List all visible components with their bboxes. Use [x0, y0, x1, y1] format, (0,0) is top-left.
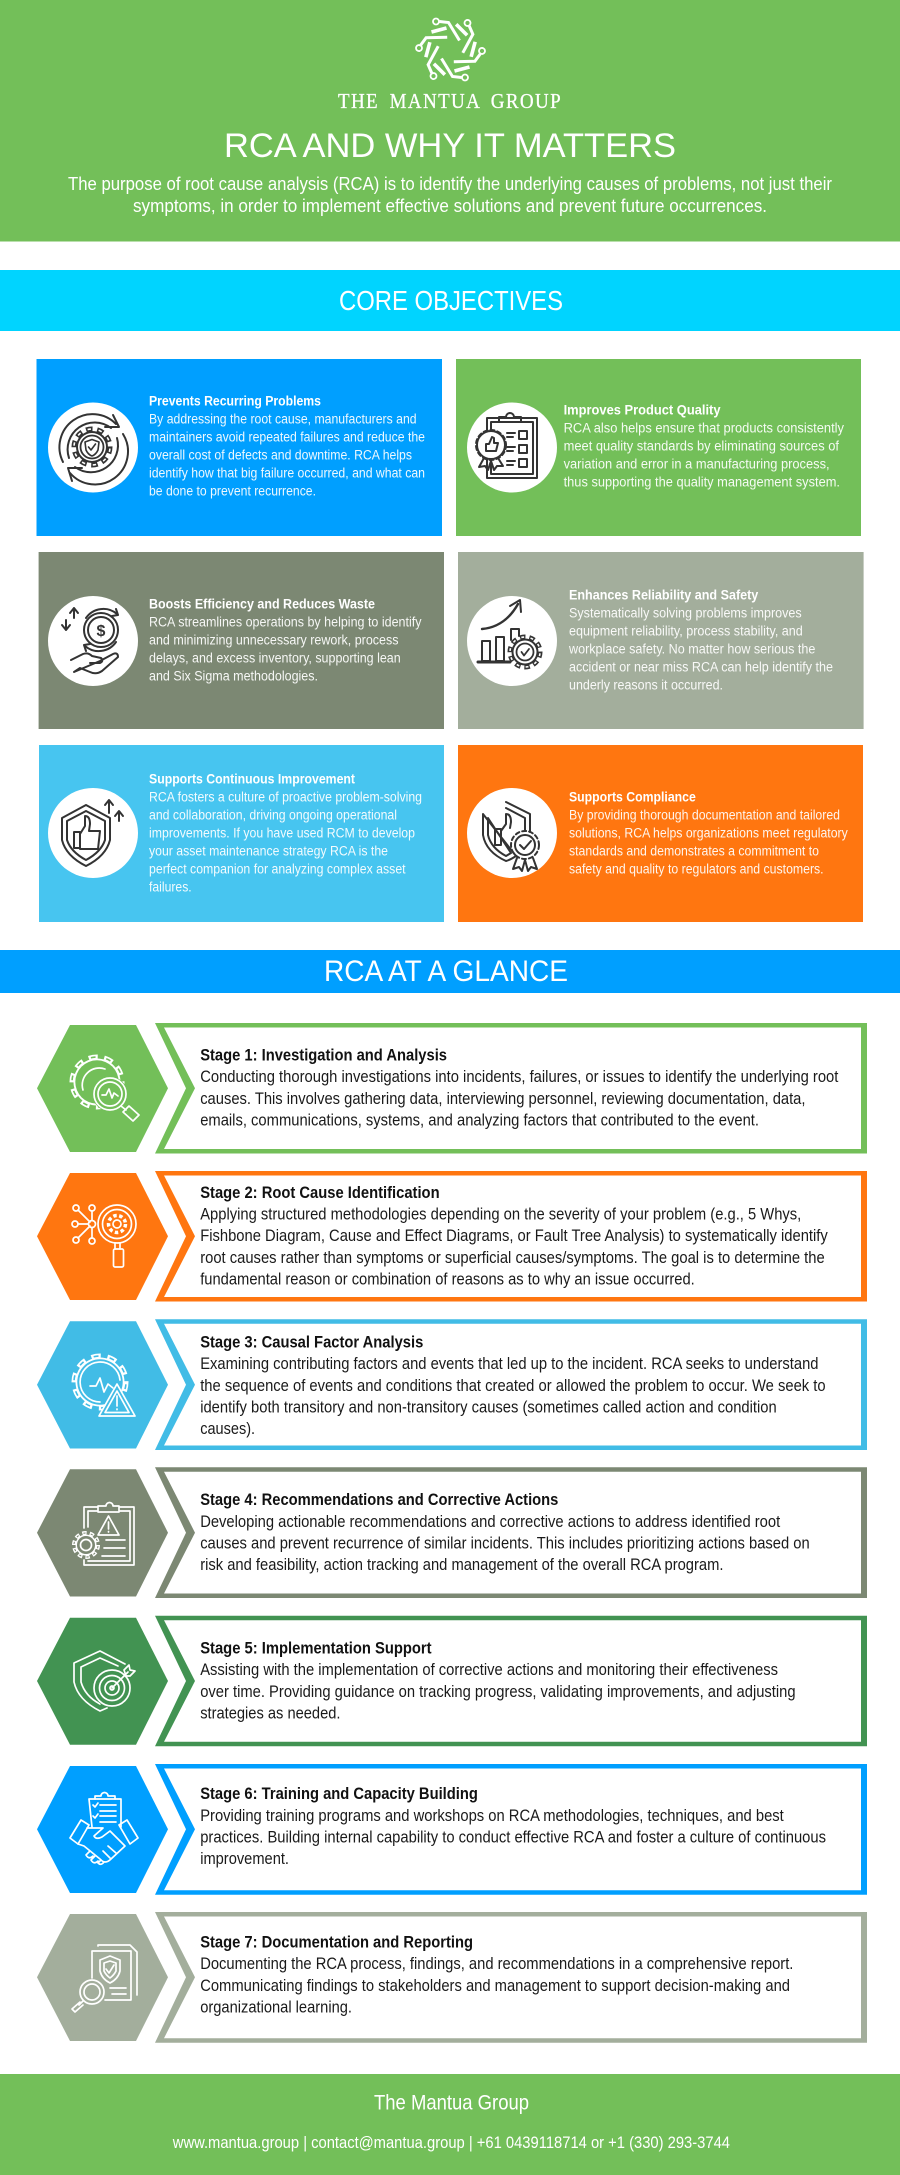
- footer name: The Mantua Group: [374, 2092, 529, 2114]
- body text: causes and prevent recurrence of similar incidents. This includes prioritizing actions based on: [200, 1534, 810, 1552]
- heading: Enhances Reliability and Safety: [569, 588, 759, 602]
- icon: hand with dollar coin: [62, 608, 118, 673]
- icon: hand with dollar coin: $: [96, 623, 106, 640]
- body text: [200, 1955, 793, 2016]
- contact details: www.mantua.group | contact@mantua.group | +61 0439118714 or +1 (330) 293-3744: [172, 2134, 730, 2152]
- title: RCA AND WHY IT MATTERS: [224, 127, 676, 165]
- body text: improvement.: [200, 1850, 289, 1868]
- hexagon: [37, 1469, 168, 1596]
- body text: and minimizing unnecessary rework, process: [149, 632, 399, 648]
- icon: gear with warning triangle: [74, 1356, 136, 1417]
- body text: practices. Building internal capability to conduct effective RCA and foster a culture of continuous: [200, 1828, 826, 1846]
- body text: over time. Providing guidance on tracking progress, validating improvements, and adjusting: [200, 1683, 796, 1701]
- body text: accident or near miss RCA can help identify the: [569, 660, 833, 674]
- panel: footer: [0, 2074, 900, 2175]
- hexagon: [37, 1618, 168, 1745]
- panel: improves product quality: [456, 359, 861, 536]
- icon: clipboard with badge: [476, 413, 537, 478]
- body text: By addressing the root cause, manufacturers and: [149, 412, 417, 426]
- body text: Providing training programs and workshops on RCA methodologies, techniques, and best: [200, 1807, 784, 1825]
- brand name: THE MANTUA GROUP: [338, 89, 562, 113]
- body text: workplace safety. No matter how serious the: [568, 642, 815, 656]
- heading: Stage 6: Training and Capacity Building: [200, 1785, 478, 1803]
- panel: stage 4: [37, 1467, 867, 1598]
- banner: RCA at a glance: [0, 950, 900, 993]
- hexagon: [37, 1173, 168, 1300]
- panel: continuous improvement: [39, 745, 444, 922]
- body text: overall cost of defects and downtime. RCA helps: [149, 448, 412, 462]
- hexagon: [37, 1321, 168, 1448]
- icon: gear with magnifier: [72, 1057, 139, 1121]
- panel: supports compliance: [458, 745, 863, 922]
- body text: [564, 420, 844, 490]
- body text: [149, 790, 422, 894]
- icon: bar chart with gear: [478, 600, 540, 667]
- body text: perfect companion for analyzing complex asset: [149, 862, 406, 876]
- heading: Stage 5: Implementation Support: [200, 1640, 432, 1658]
- icon: network with magnifier: [72, 1205, 136, 1267]
- body text: and Six Sigma methodologies.: [149, 668, 318, 684]
- body text: RCA also helps ensure that products consistently: [564, 420, 844, 436]
- heading: Stage 4: Recommendations and Corrective Actions: [200, 1491, 558, 1509]
- icon: gear with circular arrows: [59, 414, 128, 484]
- body text: maintainers avoid repeated failures and reduce the: [149, 430, 425, 444]
- heading: Supports Compliance: [569, 790, 696, 804]
- heading: Prevents Recurring Problems: [149, 394, 321, 408]
- body text: [200, 1661, 796, 1722]
- heading: Improves Product Quality: [564, 402, 721, 418]
- body text: solutions, RCA helps organizations meet regulatory: [569, 826, 848, 840]
- panel: header: [0, 0, 900, 242]
- panel: stage 1: [37, 1023, 867, 1154]
- body text: meet quality standards by eliminating sources of: [564, 438, 839, 454]
- body text: [200, 1206, 828, 1288]
- icon: document with shield and magnifier: [72, 1945, 137, 2012]
- heading: Stage 2: Root Cause Identification: [200, 1184, 440, 1202]
- body text: your asset maintenance strategy RCA is the: [149, 844, 388, 858]
- body text: [200, 1068, 839, 1130]
- icon: shield with thumbs up: [62, 800, 123, 866]
- banner: RCA at a glance: RCA AT A GLANCE: [324, 955, 568, 988]
- body text: safety and quality to regulators and customers.: [569, 862, 824, 876]
- panel: stage 5: [37, 1616, 867, 1746]
- icon: clipboard with warning and gear: [74, 1502, 134, 1565]
- frame: [155, 1467, 867, 1598]
- panel: stage 2: [37, 1171, 867, 1302]
- body text: [569, 808, 848, 876]
- body text: causes. This involves gathering data, interviewing personnel, reviewing documentation, data,: [200, 1090, 805, 1108]
- hexagon: [37, 1025, 168, 1152]
- panel: enhances reliability: [458, 552, 864, 729]
- body text: variation and error in a manufacturing process,: [564, 456, 830, 472]
- body text: underly reasons it occurred.: [569, 678, 723, 692]
- body text: Assisting with the implementation of corrective actions and monitoring their effectiveness: [200, 1661, 778, 1679]
- body text: Communicating findings to stakeholders and management to support decision-making and: [200, 1977, 790, 1995]
- hexagon: [37, 1914, 168, 2041]
- hexagon: [37, 1766, 168, 1893]
- body text: identify how that big failure occurred, and what can: [149, 466, 425, 480]
- body text: RCA fosters a culture of proactive problem-solving: [149, 790, 422, 804]
- body text: [200, 1513, 810, 1574]
- heading: Stage 3: Causal Factor Analysis: [200, 1334, 423, 1352]
- body text: emails, communications, systems, and analyzing factors that contributed to the event.: [200, 1112, 759, 1130]
- panel: boosts efficiency: [39, 552, 444, 729]
- panel: stage 6: [37, 1764, 867, 1895]
- intro text: symptoms, in order to implement effective solutions and prevent future occurrences.: [133, 196, 767, 216]
- frame: [155, 1912, 867, 2043]
- banner: core objectives: CORE OBJECTIVES: [339, 285, 563, 316]
- panel: stage 7: [37, 1912, 867, 2043]
- panel: prevents recurring problems: [36, 359, 442, 536]
- body text: be done to prevent recurrence.: [149, 484, 316, 498]
- intro text: [68, 174, 832, 216]
- panel: stage 3: [37, 1319, 867, 1450]
- body text: Fishbone Diagram, Cause and Effect Diagrams, or Fault Tree Analysis) to systematically identify: [200, 1227, 828, 1245]
- body text: Developing actionable recommendations and corrective actions to address identified root: [200, 1513, 781, 1531]
- icon: Mantua Group logo: [414, 18, 487, 81]
- frame: [155, 1616, 867, 1746]
- body text: risk and feasibility, action tracking and management of the overall RCA program.: [200, 1556, 723, 1574]
- body text: identify both transitory and non-transitory causes (sometimes called action and condition: [200, 1398, 777, 1416]
- body text: failures.: [149, 880, 192, 894]
- intro text: The purpose of root cause analysis (RCA) is to identify the underlying causes of problems, not just their: [68, 174, 832, 194]
- body text: the sequence of events and conditions that created or allowed the problem to occur. We seek to: [200, 1377, 826, 1395]
- body text: strategies as needed.: [200, 1704, 340, 1722]
- body text: root causes rather than symptoms or superficial causes/symptoms. The goal is to determine the: [200, 1249, 825, 1267]
- frame: [155, 1319, 867, 1450]
- banner: core objectives: [0, 270, 900, 331]
- body text: thus supporting the quality management system.: [564, 474, 840, 490]
- body text: fundamental reason or combination of reasons as to why an issue occurred.: [200, 1270, 695, 1288]
- heading: Boosts Efficiency and Reduces Waste: [149, 596, 375, 612]
- body text: and collaboration, driving ongoing operational: [149, 808, 397, 822]
- body text: Applying structured methodologies depending on the severity of your problem (e.g., 5 Whys,: [200, 1206, 801, 1224]
- body text: [568, 606, 833, 692]
- body text: [149, 412, 425, 498]
- frame: [155, 1764, 867, 1895]
- heading: Stage 7: Documentation and Reporting: [200, 1934, 473, 1952]
- icon: handshake with clipboard: [70, 1792, 138, 1864]
- body text: equipment reliability, process stability, and: [569, 624, 803, 638]
- frame: [155, 1023, 867, 1154]
- body text: [149, 614, 422, 684]
- body text: delays, and excess inventory, supporting lean: [149, 650, 401, 666]
- icon: shield with target: [74, 1651, 135, 1711]
- body text: Examining contributing factors and events that led up to the incident. RCA seeks to understand: [200, 1355, 818, 1373]
- body text: causes).: [200, 1420, 255, 1438]
- body text: Documenting the RCA process, findings, and recommendations in a comprehensive report.: [200, 1955, 793, 1973]
- frame: [155, 1171, 867, 1302]
- heading: Supports Continuous Improvement: [149, 772, 355, 786]
- heading: Stage 1: Investigation and Analysis: [200, 1046, 447, 1064]
- body text: [200, 1355, 826, 1438]
- body text: organizational learning.: [200, 1998, 352, 2016]
- body text: By providing thorough documentation and tailored: [569, 808, 840, 822]
- body text: Conducting thorough investigations into incidents, failures, or issues to identify the underlying root: [200, 1068, 839, 1086]
- body text: RCA streamlines operations by helping to identify: [149, 614, 422, 630]
- body text: Systematically solving problems improves: [569, 606, 802, 620]
- icon: shield with badge: [483, 802, 539, 871]
- body text: [200, 1807, 826, 1868]
- body text: improvements. If you have used RCM to develop: [149, 826, 415, 840]
- body text: standards and demonstrates a commitment to: [569, 844, 819, 858]
